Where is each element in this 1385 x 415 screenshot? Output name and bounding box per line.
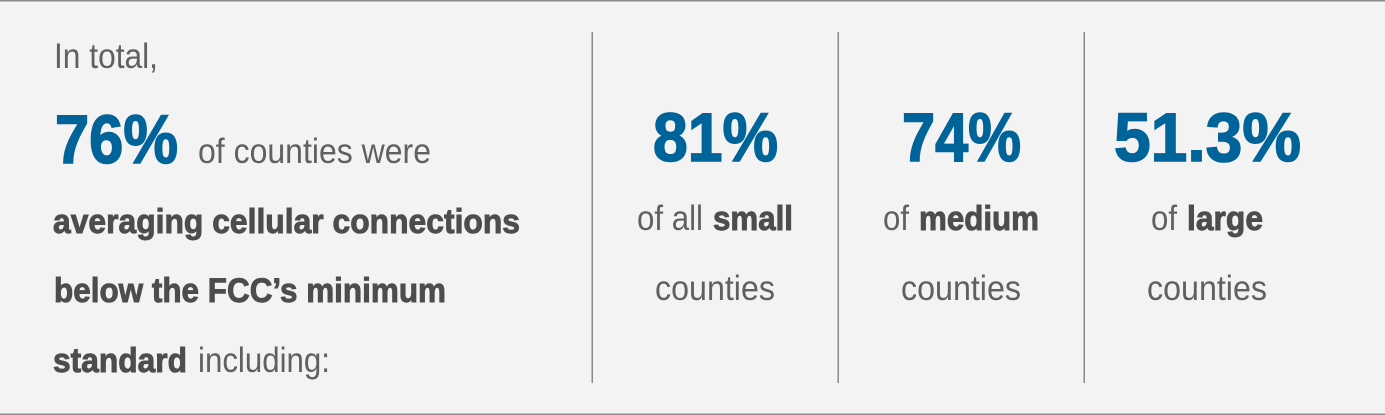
- label: of: of: [883, 199, 909, 238]
- panel: medium counties: [883, 99, 1039, 308]
- stat: 51.3%: 51.3%: [1114, 99, 1301, 176]
- label: of all: of all: [637, 199, 703, 238]
- label: counties: counties: [655, 269, 775, 308]
- label: counties: counties: [901, 269, 1021, 308]
- bold text line 1: averaging cellular connections: [53, 203, 520, 241]
- stat: 74%: 74%: [902, 99, 1021, 176]
- text: including: including:: [198, 341, 330, 380]
- bold text line 3: standard: [53, 342, 187, 380]
- bold text line 2: below the FCC’s minimum: [54, 272, 446, 310]
- label: small: small: [713, 200, 793, 238]
- label: of: of: [1151, 199, 1177, 238]
- panel: total summary: [53, 37, 520, 380]
- label: counties: counties: [1147, 269, 1267, 308]
- panel: small counties: [637, 99, 793, 308]
- headline stat: 76%: 76%: [55, 101, 178, 178]
- stat: 81%: 81%: [653, 99, 778, 176]
- intro text: In total,: [54, 37, 158, 76]
- panel: large counties: [1114, 99, 1301, 308]
- label: large: large: [1187, 200, 1263, 238]
- label: medium: medium: [919, 200, 1039, 238]
- text: of counties were: of counties were: [198, 132, 431, 171]
